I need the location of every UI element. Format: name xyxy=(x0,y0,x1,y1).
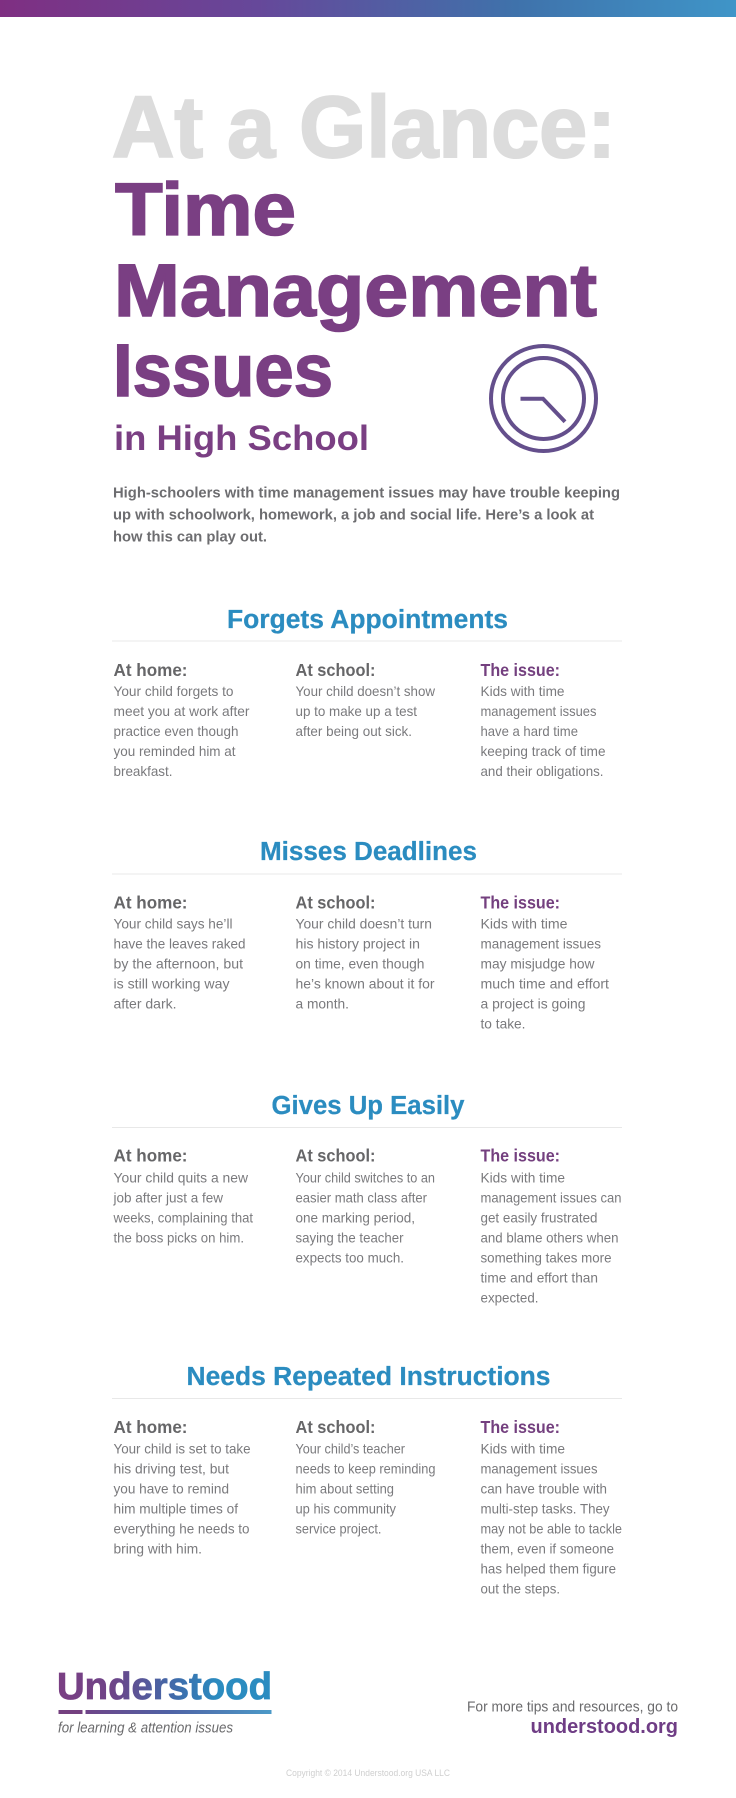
column: at school: on time, even though xyxy=(296,956,424,972)
column: the issue: The issue: xyxy=(480,1417,560,1437)
intro paragraph: how this can play out. xyxy=(113,528,267,546)
intro paragraph: up with schoolwork, homework, a job and social life. Here’s a look at xyxy=(113,506,594,524)
column: at school xyxy=(296,1417,436,1536)
column: at school: saying the teacher xyxy=(296,1230,404,1246)
column: the issue: something takes more xyxy=(480,1250,612,1266)
column: the issue: The issue: xyxy=(480,892,560,912)
column: at home: the boss picks on him. xyxy=(114,1230,244,1246)
column: at school: Your child doesn’t turn xyxy=(296,916,432,932)
column: at home: weeks, complaining that xyxy=(113,1210,253,1226)
column: the issue: out the steps. xyxy=(480,1580,560,1596)
column: at school: he’s known about it for xyxy=(296,976,435,992)
column: at school xyxy=(296,660,436,739)
column: at school: At school: xyxy=(296,892,376,912)
column: the issue: have a hard time xyxy=(480,723,578,739)
column: at home: you reminded him at xyxy=(114,743,236,759)
column: at home: breakfast. xyxy=(114,763,172,779)
column: at home: Your child is set to take xyxy=(114,1440,251,1456)
panel: Forgets Appointments xyxy=(112,606,622,779)
column: the issue: The issue: xyxy=(480,1146,560,1166)
heading: Misses Deadlines xyxy=(260,838,477,866)
column: at home xyxy=(114,892,246,1012)
column: at home: after dark. xyxy=(114,996,176,1012)
column: at home: him multiple times of xyxy=(114,1500,238,1516)
column: at school: one marking period, xyxy=(296,1210,415,1226)
heading: Forgets Appointments xyxy=(227,606,508,634)
column: the issue: management issues xyxy=(480,1460,598,1476)
column: at school: expects too much. xyxy=(296,1250,404,1266)
column: at school: Your child doesn’t show xyxy=(296,683,436,699)
column: the issue xyxy=(480,660,606,779)
column: at home: bring with him. xyxy=(114,1540,202,1556)
column: at school: At school: xyxy=(296,1417,376,1437)
column: at school: At school: xyxy=(296,1146,376,1166)
column: the issue: and blame others when xyxy=(480,1230,618,1246)
heading: Gives Up Easily xyxy=(272,1092,465,1120)
intro paragraph xyxy=(113,484,620,546)
column: at home: At home: xyxy=(114,660,188,680)
column: the issue: multi-step tasks. They xyxy=(480,1500,610,1516)
column: the issue: management issues xyxy=(480,703,596,719)
column: at home xyxy=(113,1146,253,1246)
column: the issue: a project is going xyxy=(480,996,586,1012)
logo: Understood: Understood xyxy=(57,1666,272,1708)
call to action: For more tips and resources, go to xyxy=(467,1698,678,1716)
column: the issue xyxy=(480,892,609,1032)
subtitle: in High School xyxy=(114,419,369,458)
column: at home: At home: xyxy=(114,892,188,912)
column: at home xyxy=(114,1417,251,1556)
copyright: Copyright © 2014 Understood.org USA LLC xyxy=(286,1768,450,1779)
heading: Needs Repeated Instructions xyxy=(186,1363,550,1391)
column: the issue: management issues xyxy=(480,936,601,952)
column: the issue: may misjudge how xyxy=(480,956,595,972)
column: at home: practice even though xyxy=(114,723,238,739)
call to action: understood.org xyxy=(530,1715,678,1738)
logo: Understood: for learning & attention issues xyxy=(58,1720,233,1736)
column: the issue: Kids with time xyxy=(480,1170,565,1186)
column: at school: easier math class after xyxy=(296,1190,427,1206)
column: at school: up to make up a test xyxy=(296,703,417,719)
column: the issue xyxy=(480,1417,622,1596)
title line: At a Glance: At a Glance: xyxy=(112,79,616,176)
column: at home: Your child forgets to xyxy=(114,683,234,699)
column: the issue: time and effort than xyxy=(480,1270,598,1286)
column: at home: you have to remind xyxy=(114,1480,229,1496)
column: the issue: much time and effort xyxy=(480,976,609,992)
column: at home: meet you at work after xyxy=(114,703,250,719)
column: at school: service project. xyxy=(296,1520,382,1536)
column: at home: Your child quits a new xyxy=(114,1170,249,1186)
logo: Understood xyxy=(57,1666,272,1736)
title xyxy=(112,79,616,458)
column: the issue: them, even if someone xyxy=(480,1540,614,1556)
title line: Time: Time xyxy=(115,168,296,251)
column: at home: At home: xyxy=(114,1417,188,1437)
column: at home: have the leaves raked xyxy=(114,936,246,952)
column: at school: needs to keep reminding xyxy=(296,1460,436,1476)
panel: Needs Repeated Instructions xyxy=(112,1363,622,1596)
column: at home xyxy=(114,660,250,779)
column: the issue: has helped them figure xyxy=(480,1560,616,1576)
column: the issue: management issues can xyxy=(480,1190,622,1206)
column: at school: him about setting xyxy=(296,1480,394,1496)
column: at school: a month. xyxy=(296,996,349,1012)
title line: Issues: Issues xyxy=(113,329,333,412)
column: the issue xyxy=(480,1146,622,1306)
column: at home: At home: xyxy=(114,1146,188,1166)
column: at home: is still working way xyxy=(114,976,230,992)
column: the issue: can have trouble with xyxy=(480,1480,607,1496)
column: the issue: Kids with time xyxy=(480,683,565,699)
column: at home: Your child says he’ll xyxy=(114,916,232,932)
column: at home: job after just a few xyxy=(113,1190,224,1206)
column: the issue: Kids with time xyxy=(480,1440,565,1456)
panel: Misses Deadlines xyxy=(112,838,622,1032)
column: at school xyxy=(296,1146,435,1266)
title line: Management: Management xyxy=(114,249,597,332)
panel: Gives Up Easily xyxy=(112,1092,622,1306)
column: at home: his driving test, but xyxy=(114,1460,229,1476)
column: at home: everything he needs to xyxy=(114,1520,250,1536)
call to action xyxy=(467,1698,678,1738)
column: the issue: and their obligations. xyxy=(480,763,604,779)
top gradient bar xyxy=(0,0,736,17)
column: at school: up his community xyxy=(296,1500,396,1516)
column: the issue: may not be able to tackle xyxy=(480,1520,622,1536)
column: at home: by the afternoon, but xyxy=(114,956,243,972)
column: the issue: Kids with time xyxy=(480,916,568,932)
column: the issue: The issue: xyxy=(480,660,560,680)
column: the issue: expected. xyxy=(480,1290,538,1306)
column: at school: Your child’s teacher xyxy=(296,1440,405,1456)
icon: clock xyxy=(491,346,596,451)
column: at school: his history project in xyxy=(296,936,420,952)
column: the issue: keeping track of time xyxy=(480,743,606,759)
column: at school: after being out sick. xyxy=(296,723,412,739)
column: at school xyxy=(296,892,435,1012)
column: at school: At school: xyxy=(296,660,376,680)
intro paragraph: High-schoolers with time management issues may have trouble keeping xyxy=(113,484,620,502)
column: the issue: get easily frustrated xyxy=(480,1210,598,1226)
column: at school: Your child switches to an xyxy=(296,1170,435,1186)
column: the issue: to take. xyxy=(480,1016,526,1032)
